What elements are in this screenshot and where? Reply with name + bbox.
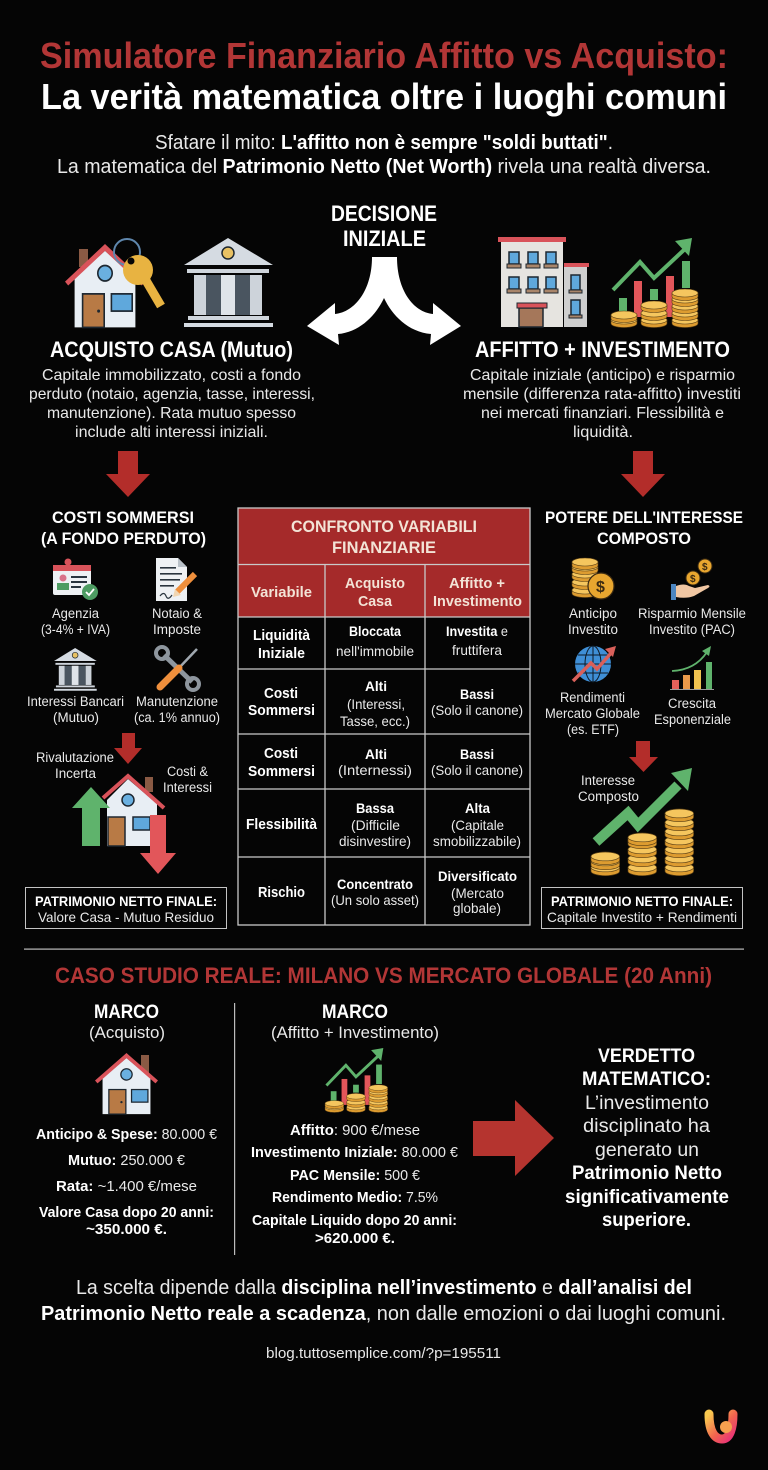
text: purchase figures: Rata: ~1.400 €/mese (56, 1178, 197, 1195)
icon: compound growth arrow and coins (591, 768, 694, 876)
callout: net worth purchase: Valore Casa - Mutuo Residuo (38, 909, 214, 925)
panel: marco purchase (36, 1002, 218, 1238)
label: rivalutazione: Rivalutazione (36, 750, 114, 765)
label: manutenzione: Manutenzione (136, 694, 218, 709)
icon: apartment building (498, 237, 589, 327)
text: rent figures: PAC Mensile: 500 € (290, 1167, 421, 1184)
label: notaio: Imposte (153, 622, 201, 637)
label: rendimenti (545, 690, 640, 737)
text: verdict: superiore. (602, 1210, 691, 1231)
label: interesse composto (578, 773, 639, 804)
text: rent figures: Rendimento Medio: 7.5% (272, 1189, 438, 1206)
label: costi e interessi: Interessi (163, 780, 212, 795)
text: conclusion (41, 1277, 726, 1325)
callout: net worth purchase (26, 888, 226, 928)
label: manutenzione: (ca. 1% annuo) (134, 710, 220, 725)
icon: notary document (156, 558, 195, 601)
icon: logo (709, 1414, 733, 1439)
table row: flessibilita (246, 800, 521, 849)
text: rent figures: Capitale Liquido dopo 20 anni: (252, 1212, 457, 1229)
icon: hand with coins (671, 559, 712, 600)
icon: hand with coins: $ (690, 574, 696, 585)
table row: liquidita: Iniziale (258, 646, 305, 662)
table row: flessibilita: Flessibilità (246, 817, 318, 833)
callout: net worth purchase: PATRIMONIO NETTO FINALE: (35, 893, 217, 909)
heading: costi sommersi (41, 508, 206, 548)
label: agenzia (41, 606, 110, 637)
table row: liquidita: Liquidità (253, 628, 311, 644)
arrow: split decision (307, 257, 461, 345)
label: interessi bancari (27, 694, 124, 725)
table row: costi sommersi 1: (Solo il canone) (431, 702, 523, 718)
panel: purchase option (29, 238, 315, 497)
heading: costi sommersi: COSTI SOMMERSI (52, 508, 194, 527)
label: rendimenti: Mercato Globale (545, 706, 640, 721)
text: rent figures (251, 1122, 459, 1247)
label: anticipo: Investito (568, 622, 618, 637)
text: purchase figures: Mutuo: 250.000 € (68, 1152, 186, 1169)
heading: case study: CASO STUDIO REALE: MILANO VS MERCATO GLOBALE (20 Anni) (55, 963, 712, 988)
text: verdict: disciplinato ha (583, 1116, 710, 1137)
label: rendimenti: Rendimenti (560, 690, 625, 705)
table header: FINANZIARIE (332, 538, 436, 557)
heading: marco acquisto: (Acquisto) (89, 1023, 165, 1042)
subtitle (57, 132, 711, 178)
text: acquisto description: include alti interessi iniziali. (75, 424, 268, 441)
table row: costi sommersi 1: Alti (365, 678, 387, 694)
table row: costi sommersi 1: Sommersi (248, 703, 315, 719)
panel: comparison table (238, 508, 530, 925)
text: purchase figures: Anticipo & Spese: 80.000 € (36, 1126, 218, 1143)
table header: CONFRONTO VARIABILI (291, 517, 477, 536)
label: rivalutazione: Incerta (55, 766, 96, 781)
icon: house with key (67, 239, 161, 327)
table row: costi sommersi 1 (248, 678, 523, 729)
arrow: down right (621, 451, 665, 497)
table row: costi sommersi 2: Alti (365, 746, 387, 762)
table row: flessibilita: Alta (465, 800, 490, 816)
text: rent figures: Affitto: 900 €/mese (290, 1122, 420, 1139)
subtitle: Sfatare il mito: L'affitto non è sempre "soldi buttati". (155, 132, 613, 154)
icon: globe with arrow (573, 646, 616, 682)
table row: rischio: Diversificato (438, 868, 517, 884)
text: affitto description: mensile (differenza rata-affitto) investiti (463, 386, 741, 403)
table row: rischio: Rischio (258, 885, 305, 901)
text: verdict: Patrimonio Netto (572, 1163, 722, 1184)
table grid (238, 508, 530, 925)
text: conclusion: Patrimonio Netto reale a scadenza, non dalle emozioni o dai luoghi comuni. (41, 1303, 726, 1325)
panel: marco rent (251, 1002, 459, 1247)
text: verdict (565, 1046, 729, 1231)
text: rent figures: Investimento Iniziale: 80.000 € (251, 1144, 459, 1161)
table row: flessibilita: Bassa (356, 800, 394, 816)
callout: net worth rent (542, 888, 742, 928)
panel: sunk costs (26, 508, 226, 928)
heading: costi sommersi: (A FONDO PERDUTO) (41, 529, 206, 548)
table row: costi sommersi 2: (Internessi) (338, 762, 412, 778)
label: risparmio mensile (638, 606, 746, 637)
label: anticipo: Anticipo (569, 606, 617, 621)
heading: affitto investimento: AFFITTO + INVESTIMENTO (475, 337, 730, 362)
heading: marco acquisto (89, 1002, 165, 1042)
table row: flessibilita: (Difficile (351, 817, 400, 833)
decision heading (331, 201, 437, 251)
label: costi e interessi: Costi & (167, 764, 208, 779)
text: affitto description: nei mercati finanziari. Flessibilità e (481, 405, 724, 422)
icon: house with up and down arrows (72, 776, 176, 874)
label: notaio (152, 606, 202, 637)
table row: rischio: globale) (453, 900, 501, 916)
table row: liquidita: Investita e (446, 623, 508, 639)
table row: rischio (258, 868, 517, 916)
label: rendimenti: (es. ETF) (567, 722, 619, 737)
table row: liquidita (253, 623, 508, 662)
heading: potere interesse composto (545, 508, 743, 548)
table row: rischio: Concentrato (337, 876, 413, 892)
text: purchase figures: ~350.000 €. (86, 1221, 167, 1238)
heading: marco affitto: MARCO (322, 1002, 388, 1023)
text: rent figures: >620.000 €. (315, 1230, 395, 1247)
panel: compound interest (542, 508, 746, 928)
table row: costi sommersi 1: (Interessi, (347, 696, 405, 712)
label: interesse composto: Interesse (581, 773, 635, 788)
label: costi e interessi (163, 764, 212, 795)
title (40, 35, 728, 117)
label: anticipo (568, 606, 618, 637)
table header: Affitto + (449, 576, 505, 592)
label: interessi bancari: (Mutuo) (53, 710, 99, 725)
text: verdict: significativamente (565, 1187, 729, 1208)
label: interessi bancari: Interessi Bancari (27, 694, 124, 709)
table header: Casa (358, 594, 393, 610)
table row: rischio: (Mercato (451, 885, 504, 901)
table row: costi sommersi 2: Costi (264, 746, 298, 762)
label: risparmio mensile: Risparmio Mensile (638, 606, 746, 621)
table row: rischio: (Un solo asset) (331, 892, 419, 908)
icon: growth chart (325, 1048, 388, 1112)
table header (238, 508, 530, 617)
table row: costi sommersi 1: Tasse, ecc.) (340, 713, 410, 729)
title: La verità matematica oltre i luoghi comuni (41, 76, 727, 117)
callout: net worth rent: PATRIMONIO NETTO FINALE: (551, 893, 733, 909)
text: source url: blog.tuttosemplice.com/?p=195511 (266, 1345, 501, 1362)
text: affitto description (463, 367, 741, 441)
label: interesse composto: Composto (578, 789, 639, 804)
label: crescita: Esponenziale (654, 712, 731, 727)
icon: coins with dollar (572, 558, 614, 599)
callout: net worth rent: Capitale Investito + Rendimenti (547, 909, 737, 925)
icon: house (96, 1055, 157, 1114)
label: manutenzione (134, 694, 220, 725)
table header: Acquisto (345, 576, 405, 592)
heading: marco affitto: (Affitto + Investimento) (271, 1023, 439, 1042)
icon: coins with dollar: $ (596, 579, 605, 596)
text: verdict: VERDETTO (598, 1046, 695, 1067)
heading: potere interesse composto: POTERE DELL'INTERESSE (545, 508, 743, 527)
text: purchase figures (36, 1126, 218, 1238)
icon: bank (184, 238, 273, 327)
decision heading: DECISIONE (331, 201, 437, 226)
text: acquisto description: perduto (notaio, agenzia, tasse, interessi, (29, 386, 315, 403)
icon: agency badge (53, 558, 98, 600)
subtitle: La matematica del Patrimonio Netto (Net Worth) rivela una realtà diversa. (57, 156, 711, 178)
heading: acquisto casa: ACQUISTO CASA (Mutuo) (50, 337, 293, 362)
text: conclusion: La scelta dipende dalla disciplina nell’investimento e dall’analisi del (76, 1277, 692, 1299)
table header: Variabile (251, 585, 312, 601)
icon: small bank (54, 648, 97, 691)
text: verdict: generato un (595, 1140, 699, 1161)
table row: costi sommersi 1: Bassi (460, 686, 494, 702)
text: acquisto description (29, 367, 315, 441)
table row: flessibilita: smobilizzabile) (433, 833, 521, 849)
heading: marco affitto (271, 1002, 439, 1042)
table row: flessibilita: disinvestire) (339, 833, 411, 849)
arrow: down left (106, 451, 150, 497)
label: agenzia: Agenzia (52, 606, 99, 621)
label: risparmio mensile: Investito (PAC) (649, 622, 735, 637)
text: affitto description: Capitale iniziale (anticipo) e risparmio (470, 367, 735, 384)
text: acquisto description: manutenzione). Rata mutuo spesso (47, 405, 296, 422)
text: affitto description: liquidità. (573, 424, 633, 441)
panel: rent option (463, 237, 741, 497)
text: purchase figures: Valore Casa dopo 20 anni: (39, 1204, 214, 1221)
table row: costi sommersi 2: Sommersi (248, 764, 315, 780)
heading: marco acquisto: MARCO (94, 1002, 159, 1023)
table row: costi sommersi 2 (248, 746, 523, 780)
label: notaio: Notaio & (152, 606, 202, 621)
text: verdict: L’investimento (585, 1093, 709, 1114)
icon: hand with coins: $ (702, 562, 708, 573)
arrow: small down right (629, 741, 658, 772)
text: acquisto description: Capitale immobilizzato, costi a fondo (42, 367, 301, 384)
table row: liquidita: Bloccata (349, 623, 401, 639)
label: crescita (654, 696, 731, 727)
table row: costi sommersi 2: Bassi (460, 746, 494, 762)
icon: exponential bars (670, 646, 714, 690)
table row: liquidita: fruttifera (452, 642, 502, 658)
heading: potere interesse composto: COMPOSTO (597, 529, 691, 548)
table row: liquidita: nell'immobile (336, 643, 414, 659)
label: crescita: Crescita (668, 696, 716, 711)
text: verdict: MATEMATICO: (582, 1069, 711, 1090)
arrow: small down left (114, 733, 142, 764)
icon: growth chart with coins (611, 238, 698, 328)
label: rivalutazione (36, 750, 114, 781)
table header: Investimento (433, 594, 522, 610)
label: agenzia: (3-4% + IVA) (41, 622, 110, 637)
decision heading: INIZIALE (343, 226, 426, 251)
icon: tools (156, 647, 199, 690)
title: Simulatore Finanziario Affitto vs Acquisto: (40, 35, 728, 76)
table row: flessibilita: (Capitale (451, 817, 504, 833)
arrow: to verdict (473, 1100, 554, 1176)
table row: costi sommersi 1: Costi (264, 686, 298, 702)
table row: costi sommersi 2: (Solo il canone) (431, 762, 523, 778)
